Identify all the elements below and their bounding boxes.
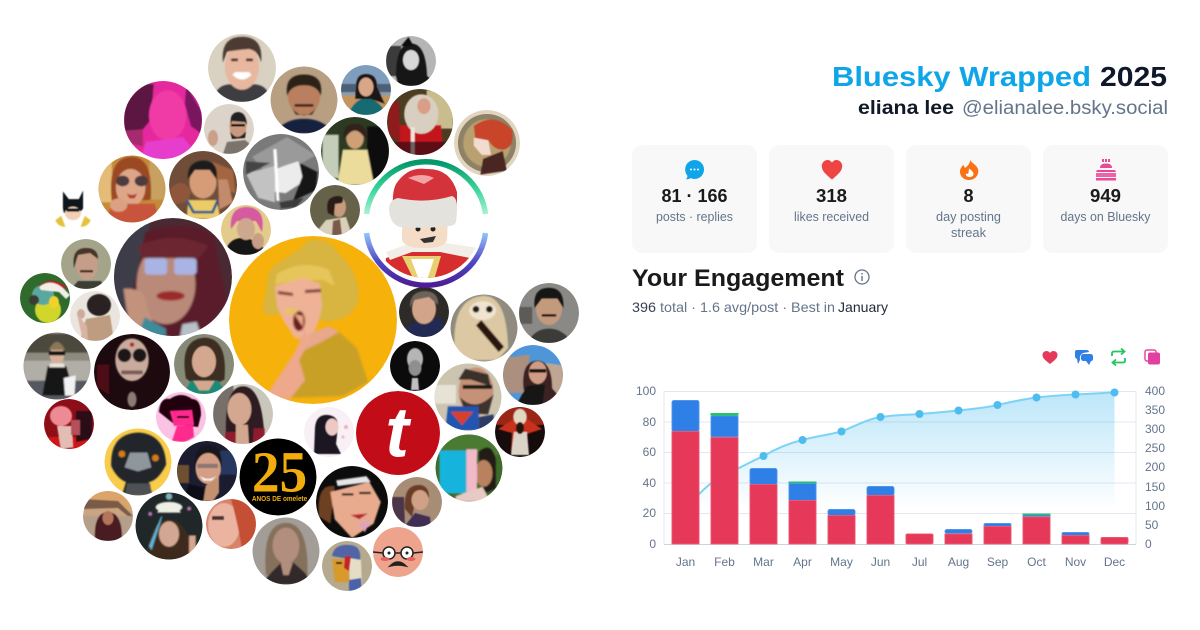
avatar: child in old photograph [321, 117, 389, 185]
right axis labels: 250 [1145, 441, 1165, 455]
right axis labels: 400 [1145, 384, 1165, 398]
avatar: boy in yellow tank top [169, 151, 237, 219]
avatar: plush toy with cola bottle [450, 294, 518, 362]
avatar: woman with long dark and red hair [213, 384, 273, 444]
avatar: 25 anos de omelete logo: 25 [252, 440, 307, 505]
engagement summary: 396 [632, 299, 656, 315]
avatar: pink haired person [221, 205, 271, 255]
progress ring: blue and purple bottom arc [366, 233, 486, 285]
avatar: man with mustache, outdoors [61, 239, 111, 289]
avatar: Lego minifigure in Santa hat with gradient ring [366, 162, 486, 285]
right axis labels: 200 [1145, 460, 1165, 474]
chart legend icons [1042, 348, 1160, 366]
avatar: emu on yellow background [104, 428, 172, 496]
title: 2025 [1100, 61, 1167, 92]
stat card: day posting streak [906, 145, 1031, 253]
title: Bluesky Wrapped [832, 61, 1091, 92]
avatar: smiling woman with glasses [177, 441, 237, 501]
avatar: woman with skull face paint [94, 334, 170, 410]
engagement summary: total · 1.6 avg/post · Best in [660, 299, 835, 315]
title [832, 61, 1167, 92]
avatar: woman in pink light [124, 81, 202, 159]
icon: info [855, 270, 869, 284]
avatar: bearded man with superman mug [434, 364, 502, 430]
month labels: Feb [714, 555, 735, 569]
avatar: man in profile [310, 185, 360, 235]
stat card: day posting streak: 8 [963, 186, 974, 206]
avatar: 25 anos de omelete logo: ANOS DE omelete [252, 496, 307, 503]
icon: quotes pink squares [1145, 350, 1160, 364]
avatar: illustrated blonde woman on yellow, largest bubble [229, 236, 397, 404]
avatar: woman with glasses smiling in profile [392, 477, 442, 527]
stacked bar and area chart [636, 384, 1165, 569]
month labels: Oct [1027, 555, 1046, 569]
left axis labels [636, 384, 656, 551]
stat card: day posting streak: streak [951, 226, 987, 240]
right axis labels: 150 [1145, 480, 1165, 494]
left axis labels: 0 [649, 537, 656, 551]
icon: flame [960, 160, 978, 180]
right axis labels: 0 [1145, 537, 1152, 551]
right axis labels [1145, 384, 1165, 551]
month labels: Mar [753, 555, 774, 569]
avatar: woman with flower crown [136, 492, 202, 560]
avatar: Santa Claus [387, 89, 453, 155]
avatar: woman with sunglasses [98, 156, 166, 222]
cumulative area [686, 392, 1114, 544]
engagement summary [632, 299, 888, 315]
user name and handle [858, 98, 1168, 119]
stat card: likes received [769, 145, 894, 253]
stat card: posts and replies: posts · replies [656, 210, 733, 224]
avatar: bearded man with glasses [204, 104, 254, 154]
icon: heart [822, 160, 842, 180]
right axis labels: 300 [1145, 422, 1165, 436]
engagement summary: January [838, 299, 888, 315]
avatar: red-haired art nouveau portrait [454, 110, 520, 176]
icon: birthday cake [1096, 159, 1116, 180]
icon: replies chat bubbles [1075, 350, 1093, 365]
avatar: vampire in red cape [495, 407, 545, 457]
avatar: smiling woman with curly hair [174, 334, 234, 394]
line points [760, 388, 1118, 460]
month labels: May [830, 555, 853, 569]
left axis labels: 80 [643, 415, 656, 429]
left axis labels: 100 [636, 384, 656, 398]
avatar: parrot with santa hat [20, 273, 70, 323]
avatar: illustrated woman with floral background [304, 407, 354, 457]
user name and handle: eliana lee [858, 98, 954, 119]
stat card: likes received: 318 [816, 186, 847, 206]
stat card: posts and replies [632, 145, 757, 253]
left axis labels: 20 [643, 506, 656, 520]
avatar: black and white woman [386, 36, 436, 86]
avatar: cubist portrait [322, 541, 372, 591]
stat card: days on Bluesky [1043, 145, 1168, 253]
month labels [676, 555, 1125, 569]
avatar: pop art comic woman [316, 466, 388, 538]
cumulative line [686, 392, 1114, 508]
avatar: red circle with t logo: t [385, 393, 411, 472]
avatar: pink cartoon with dark hair [156, 392, 206, 442]
month labels: Jan [676, 555, 695, 569]
stat card: likes received: likes received [794, 210, 869, 224]
progress ring: green top arc [366, 162, 486, 214]
left axis labels: 40 [643, 476, 656, 490]
bars: likes [672, 431, 1128, 544]
bars: reposts [710, 413, 1050, 515]
avatar bubble cluster [20, 34, 579, 591]
avatar: red-haired woman close up [206, 499, 256, 549]
stat card: day posting streak: day posting [936, 210, 1001, 224]
bars: replies [672, 400, 1089, 535]
right axis labels: 50 [1145, 518, 1159, 532]
avatar: pink creature on red background [44, 399, 94, 449]
avatar: red circle with t logo [356, 391, 440, 475]
avatar: woman at the Colosseum [503, 345, 563, 405]
avatar: woman at the beach [341, 65, 391, 115]
right axis labels: 100 [1145, 499, 1165, 513]
avatar: man with gray hair [399, 287, 449, 337]
avatar: young man with mustache [519, 283, 579, 343]
icon: likes heart [1042, 351, 1058, 364]
heading: Your Engagement: Your Engagement [632, 265, 844, 292]
left axis labels: 60 [643, 445, 656, 459]
stat card: days on Bluesky: 949 [1090, 186, 1121, 206]
avatar: monochrome cartoon character with cracked screen [243, 134, 319, 210]
stat card: posts and replies: 81 · 166 [662, 186, 728, 206]
avatar: batman doodle [55, 191, 91, 227]
avatar: cartoon face with glasses and mustache [373, 527, 423, 577]
icon: reposts arrows [1112, 348, 1125, 366]
avatar: man with mustache [270, 66, 338, 134]
right axis labels: 350 [1145, 403, 1165, 417]
avatar: woman with red hair and glasses [114, 218, 232, 336]
month labels: Jun [871, 555, 890, 569]
avatar: woman holding a colorful notebook [436, 434, 502, 502]
month labels: Dec [1104, 555, 1125, 569]
user name and handle: @elianalee.bsky.social [962, 98, 1168, 119]
month labels: Sep [987, 555, 1008, 569]
month labels: Jul [912, 555, 927, 569]
avatar: 25 anos de omelete logo [240, 438, 316, 516]
avatar: bald man with beard, monochrome [390, 341, 440, 391]
avatar: woman by a river at sunset [83, 491, 133, 541]
month labels: Apr [793, 555, 812, 569]
avatar: blonde woman with long hair [252, 518, 320, 584]
icon: chat bubble [685, 160, 704, 179]
avatar: pug [70, 291, 120, 341]
stat card: days on Bluesky: days on Bluesky [1060, 210, 1151, 224]
avatar: smiling man with dark hair [208, 34, 276, 102]
month labels: Nov [1065, 555, 1086, 569]
avatar: woman with black dress and sunglasses, city street [24, 332, 90, 400]
month labels: Aug [948, 555, 969, 569]
lego figure [370, 166, 482, 280]
